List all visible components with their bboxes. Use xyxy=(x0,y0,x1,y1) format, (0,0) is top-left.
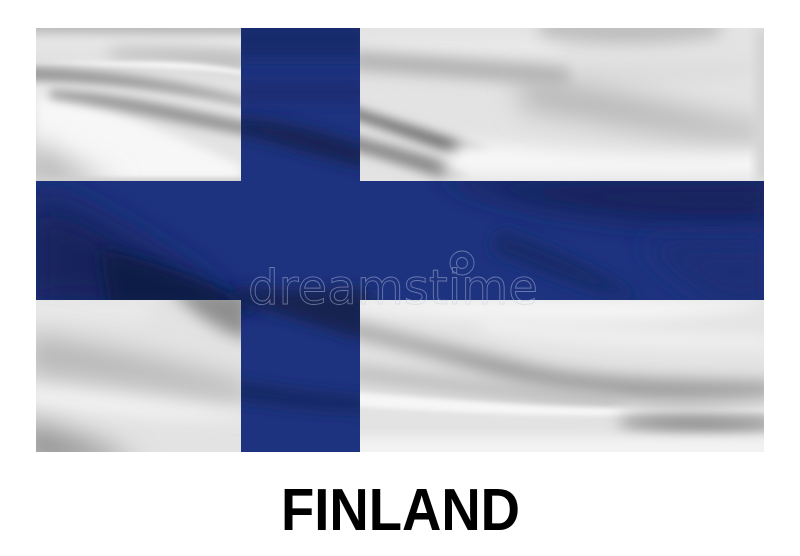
folds on vertical bar bottom xyxy=(231,290,370,412)
top-right canton folds xyxy=(360,28,764,181)
blue cross with fabric folds xyxy=(26,20,775,452)
watermark spiral icon xyxy=(450,251,474,275)
watermark text: dreamstime xyxy=(248,260,538,316)
flag xyxy=(20,18,775,465)
folds on horizontal bar xyxy=(26,176,775,310)
top-left canton folds xyxy=(36,28,241,181)
watermark xyxy=(248,251,538,316)
bottom-left canton folds xyxy=(36,300,241,452)
white cantons with fabric folds xyxy=(20,18,775,465)
folds on vertical bar top xyxy=(241,28,360,173)
bottom-right canton folds xyxy=(350,300,775,460)
title: FINLAND xyxy=(281,477,520,543)
